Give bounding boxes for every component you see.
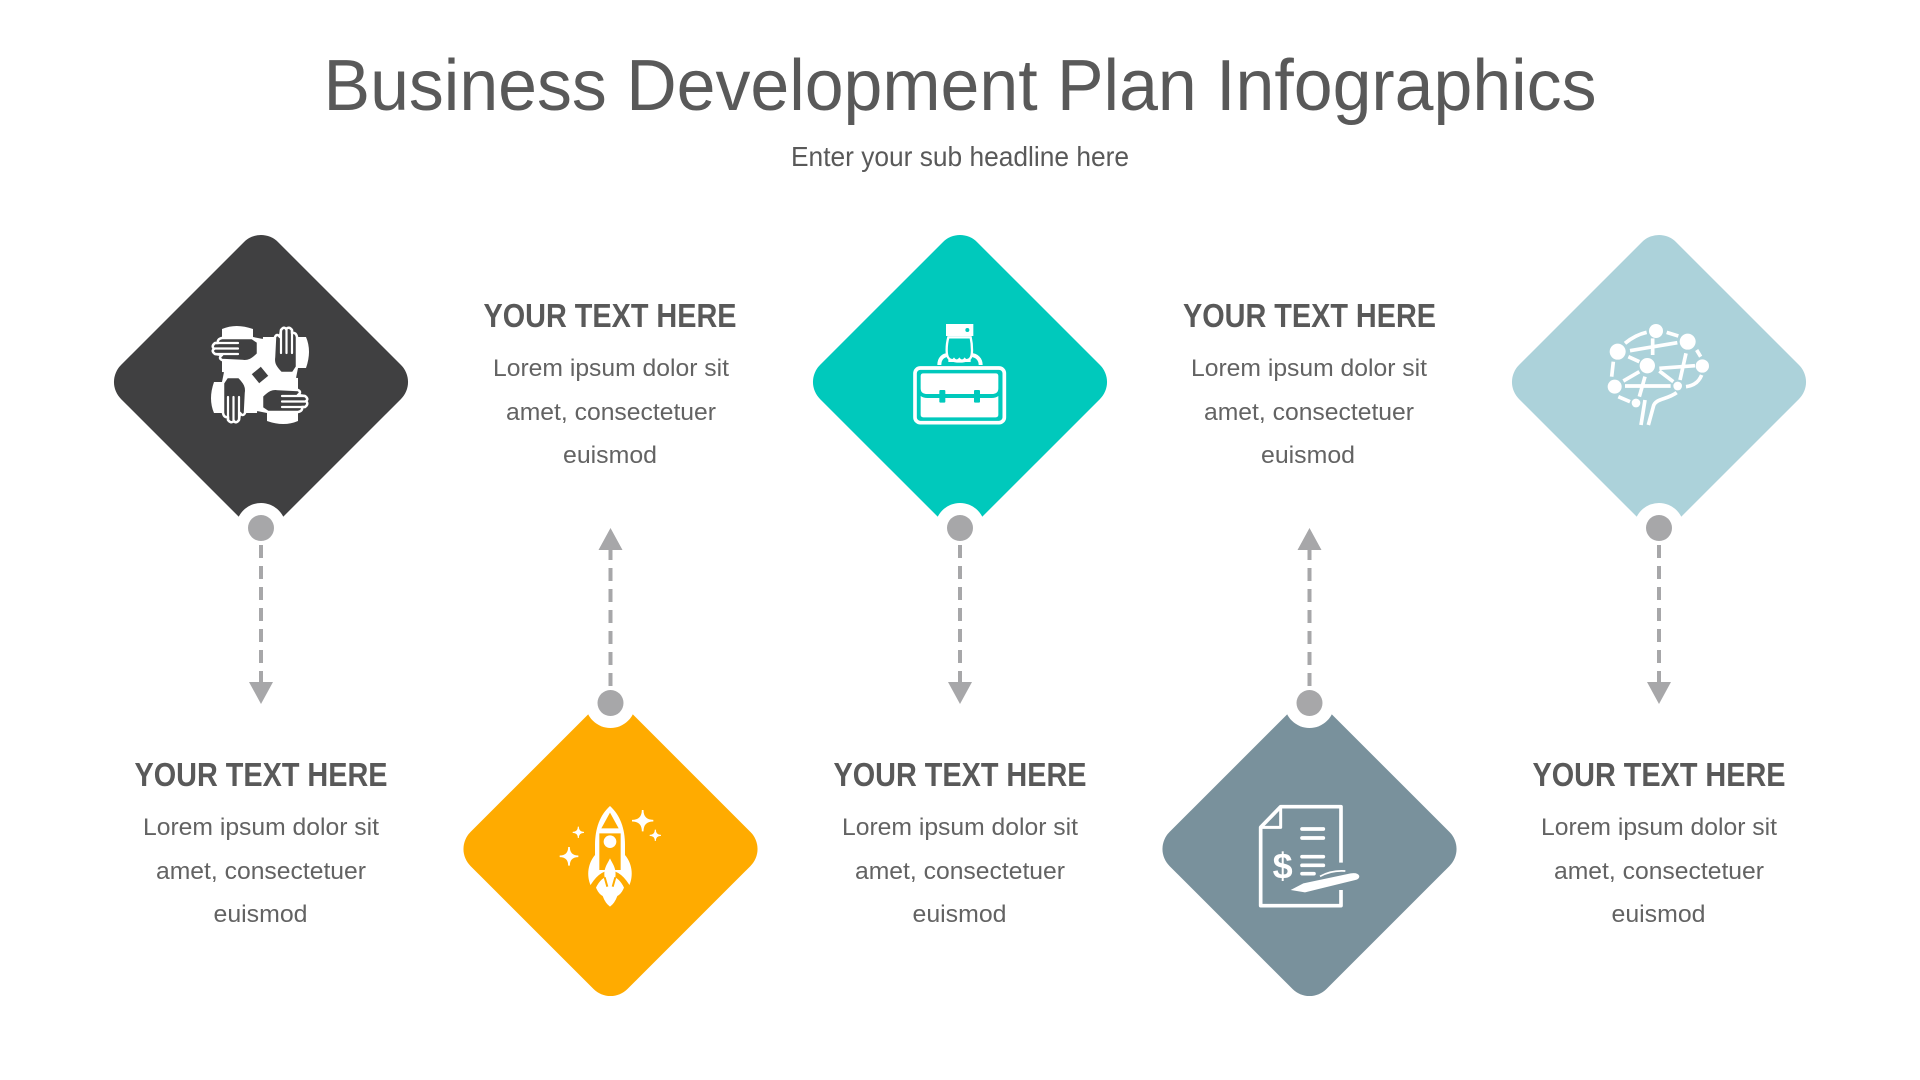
- connector node 1: [236, 503, 286, 553]
- panel: step 5: [1502, 225, 1816, 928]
- arrow up 2: [598, 528, 622, 686]
- connector node 3: [935, 503, 985, 553]
- arrow down 3: [948, 545, 972, 704]
- connector node 2: [586, 678, 636, 728]
- icon: invoice document with pen: $: [1273, 846, 1293, 887]
- panel: step 4: [1153, 297, 1466, 1006]
- body text 1: Lorem ipsum dolor sit: [143, 814, 379, 841]
- body text 5: amet, consectetuer: [1554, 858, 1764, 885]
- body text 3: amet, consectetuer: [855, 858, 1065, 885]
- heading 2: YOUR TEXT HERE: [484, 297, 736, 334]
- body text 3: [842, 814, 1078, 928]
- diamond 3: [803, 225, 1117, 539]
- icon: invoice document with pen: [1261, 807, 1359, 906]
- heading 5: YOUR TEXT HERE: [1532, 756, 1786, 793]
- body text 4: Lorem ipsum dolor sit: [1191, 355, 1427, 382]
- icon: briefcase with hand: [915, 324, 1004, 423]
- icon: brain network: [1608, 324, 1709, 425]
- body text 2: Lorem ipsum dolor sit: [493, 355, 729, 382]
- body text 3: euismod: [912, 901, 1006, 928]
- body text 2: amet, consectetuer: [506, 399, 716, 426]
- arrow down 1: [249, 545, 273, 704]
- body text 2: euismod: [563, 442, 657, 469]
- body text 5: Lorem ipsum dolor sit: [1541, 814, 1777, 841]
- body text 2: [493, 355, 729, 469]
- title: Business Development Plan Infographics: [324, 46, 1596, 126]
- diamond 1: [104, 225, 418, 539]
- connector node 5: [1634, 503, 1684, 553]
- diamond 4: [1153, 692, 1466, 1006]
- body text 4: [1191, 355, 1427, 469]
- heading 4: YOUR TEXT HERE: [1183, 297, 1436, 334]
- body text 3: Lorem ipsum dolor sit: [842, 814, 1078, 841]
- icon: rocket: [560, 806, 661, 907]
- connector node 4: [1284, 678, 1334, 728]
- icon: four hands: [211, 326, 309, 424]
- arrow down 5: [1647, 545, 1671, 704]
- panel: step 3: [803, 225, 1117, 928]
- diamond 5: [1502, 225, 1816, 539]
- body text 4: euismod: [1261, 442, 1355, 469]
- arrow up 4: [1298, 528, 1322, 686]
- body text 4: amet, consectetuer: [1204, 399, 1414, 426]
- diamond 2: [454, 692, 767, 1006]
- body text 1: [143, 814, 379, 928]
- body text 1: amet, consectetuer: [156, 858, 366, 885]
- body text 5: [1541, 814, 1777, 928]
- heading 1: YOUR TEXT HERE: [134, 756, 388, 793]
- panel: step 1: [104, 225, 418, 928]
- subtitle: Enter your sub headline here: [791, 141, 1129, 172]
- body text 1: euismod: [214, 901, 308, 928]
- panel: step 2: [454, 297, 767, 1006]
- body text 5: euismod: [1612, 901, 1706, 928]
- heading 3: YOUR TEXT HERE: [834, 756, 1086, 793]
